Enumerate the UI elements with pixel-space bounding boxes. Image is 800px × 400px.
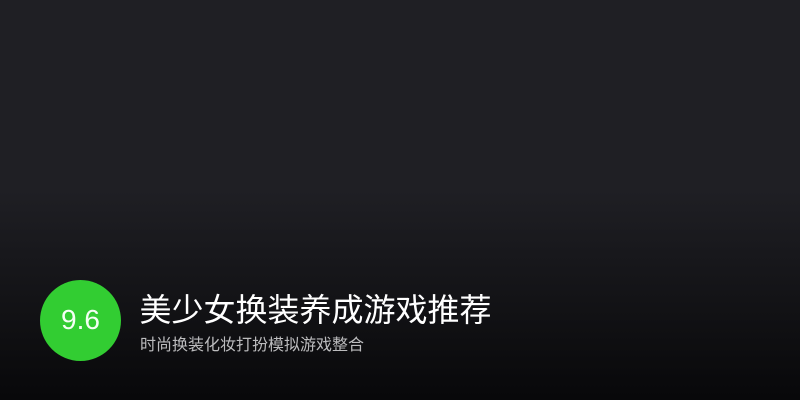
score badge bbox=[40, 280, 121, 361]
subtitle: 时尚换装化妆打扮模拟游戏整合 bbox=[140, 337, 364, 354]
title: 美少女换装养成游戏推荐 bbox=[140, 292, 492, 328]
score badge: 9.6 bbox=[61, 304, 100, 335]
